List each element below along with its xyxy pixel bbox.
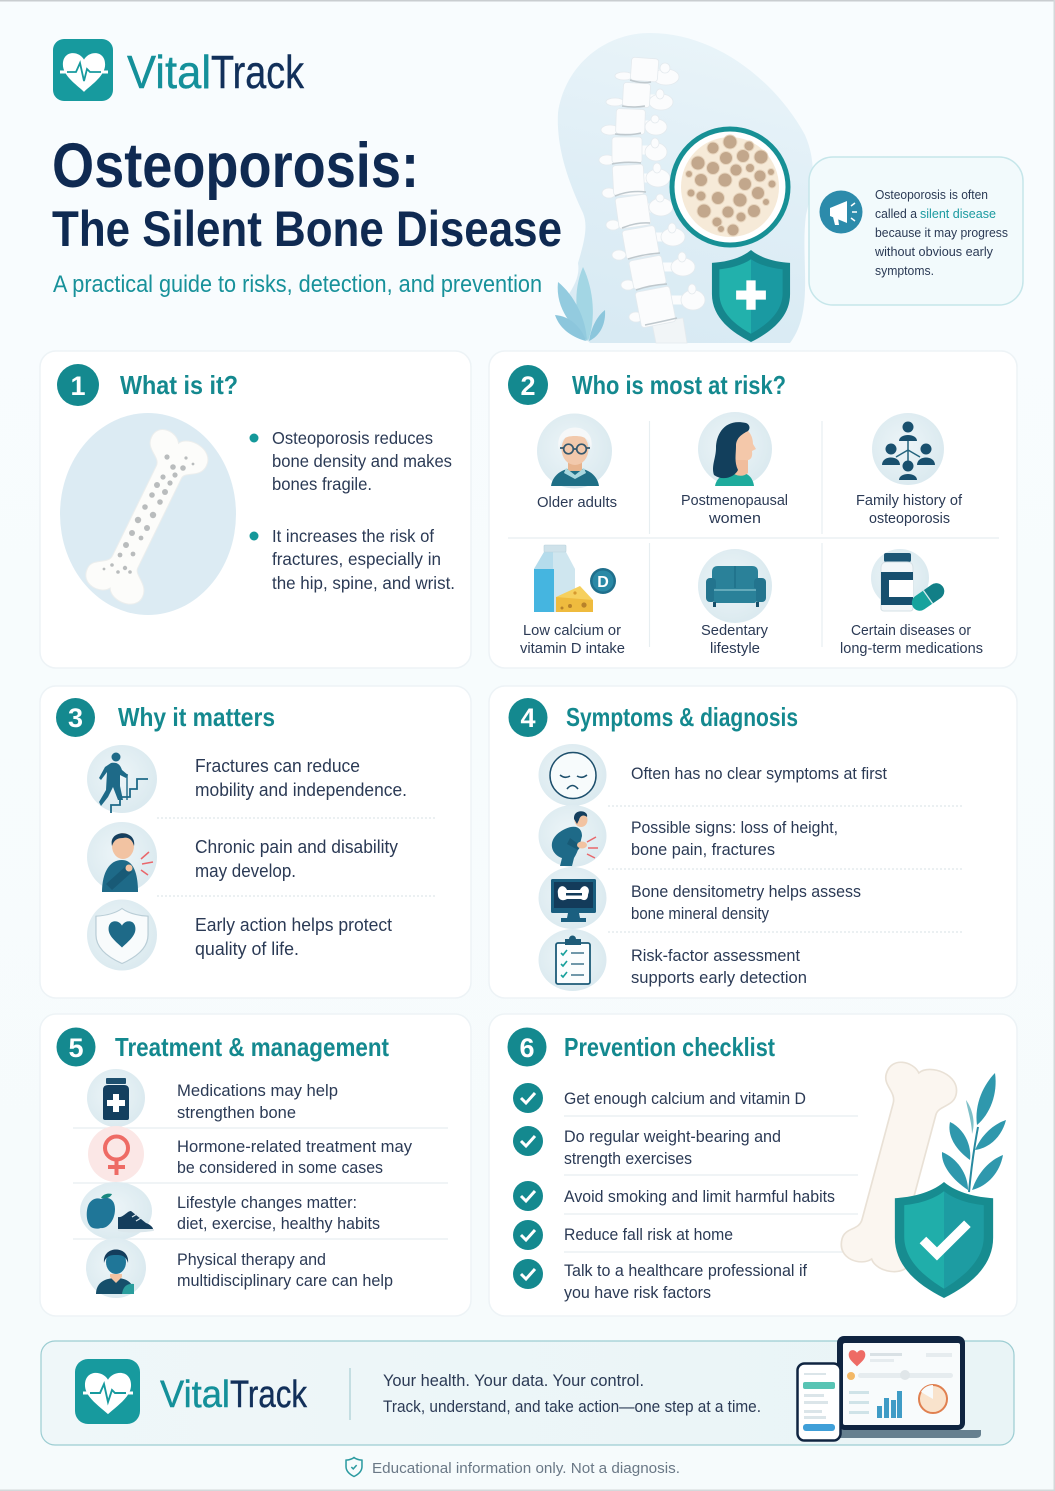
footer band <box>41 1336 1014 1445</box>
panel 2: Who is most at risk? <box>489 351 1017 668</box>
illustration: spine with bone cross-section and shield <box>555 33 813 343</box>
icon: porous bone <box>60 413 236 615</box>
footer tagline: Your health. Your data. Your control. <box>383 1372 644 1390</box>
text: Lifestyle changes matter: <box>177 1194 357 1212</box>
badge 3: 3 <box>68 703 83 733</box>
panel 6: Prevention checklist <box>489 1014 1017 1316</box>
illustration: laptop and phone dashboard <box>798 1336 981 1440</box>
text block: bullets: fractures, especially in <box>272 549 441 569</box>
text: postmenopausal women: Postmenopausal <box>681 493 788 509</box>
text: Often has no clear symptoms at first <box>631 765 887 783</box>
icon: shield with heart <box>87 900 157 970</box>
text: checklist: Do regular weight-bearing and <box>564 1128 781 1146</box>
icon: family history <box>872 413 944 485</box>
logo: VitalTrack header: Track <box>211 46 305 98</box>
text block: bullets <box>250 428 455 593</box>
text <box>195 756 407 800</box>
icon: megaphone <box>820 190 862 234</box>
icon: leaves <box>555 267 605 341</box>
footer wordmark: Vital <box>160 1374 230 1416</box>
text: family history <box>856 493 963 527</box>
icon: pill bottle and capsule <box>871 549 947 614</box>
panel 5: Treatment & management <box>40 1014 471 1316</box>
title: The Silent Bone Disease <box>52 201 562 257</box>
text: Bone densitometry helps assess <box>631 883 861 901</box>
icon: older adult <box>537 414 612 488</box>
text <box>631 883 861 923</box>
icon: care professional <box>86 1238 146 1298</box>
heading: Treatment & management <box>115 1032 389 1062</box>
text: Medications may help <box>177 1082 338 1100</box>
text: checklist: Avoid smoking and limit harmful habits <box>564 1188 835 1206</box>
callout: silent disease: without obvious early <box>874 245 994 259</box>
footer tagline: Track, understand, and take action—one step at a time. <box>383 1398 761 1416</box>
footer tagline <box>383 1372 761 1416</box>
text: Possible signs: loss of height, <box>631 819 838 837</box>
text: quality of life. <box>195 939 299 959</box>
badge 2 <box>508 365 548 405</box>
text block: bullets: bones fragile. <box>272 474 372 494</box>
icon: bone densitometry monitor <box>538 867 606 929</box>
text block: bullets: the hip, spine, and wrist. <box>272 573 455 593</box>
callout: silent disease: because it may progress <box>875 226 1008 240</box>
icon: milk, cheese and vitamin D <box>534 545 616 612</box>
text: sedentary lifestyle: lifestyle <box>710 641 760 657</box>
heading: Prevention checklist <box>564 1032 775 1062</box>
badge 2: 2 <box>520 371 536 401</box>
text: older adults: Older adults <box>537 495 617 511</box>
text: checklist: you have risk factors <box>564 1284 711 1302</box>
icon: shield with check <box>895 1182 993 1298</box>
badge 3 <box>56 698 95 737</box>
badge 5 <box>56 1028 96 1066</box>
icon: leaves <box>942 1073 1006 1192</box>
footer wordmark: Track <box>230 1374 308 1416</box>
text: postmenopausal women <box>681 493 788 527</box>
text: be considered in some cases <box>177 1159 383 1177</box>
text: diet, exercise, healthy habits <box>177 1215 380 1233</box>
text <box>177 1194 380 1233</box>
callout: silent disease: symptoms. <box>875 264 934 278</box>
icon: small shield <box>346 1458 362 1476</box>
badge 5: 5 <box>68 1033 84 1063</box>
text: strengthen bone <box>177 1104 296 1122</box>
text: mobility and independence. <box>195 780 407 800</box>
text: sedentary lifestyle: Sedentary <box>701 623 769 639</box>
text: family history: osteoporosis <box>869 511 950 527</box>
text: postmenopausal women: women <box>708 511 761 527</box>
icon: clipboard checklist <box>538 929 606 991</box>
heading: Symptoms & diagnosis <box>566 702 798 732</box>
text: Risk-factor assessment <box>631 947 800 965</box>
icon: walking up stairs <box>87 745 157 813</box>
heading: Why it matters <box>118 702 275 732</box>
badge 4: 4 <box>520 703 536 733</box>
badge 4 <box>508 698 548 737</box>
text: sedentary lifestyle <box>701 623 769 657</box>
badge 1 <box>57 364 99 406</box>
text: bone pain, fractures <box>631 841 775 859</box>
panel 3: Why it matters <box>40 686 471 998</box>
text <box>631 819 838 859</box>
text: Physical therapy and <box>177 1251 326 1269</box>
text: checklist <box>564 1090 835 1302</box>
icon: shield with plus <box>712 250 790 342</box>
text: Early action helps protect <box>195 915 392 935</box>
icon: sofa <box>698 549 772 623</box>
text block: bullets: It increases the risk of <box>272 526 434 546</box>
logo: VitalTrack header: Vital <box>127 46 211 98</box>
icon: apple and shoe <box>80 1182 153 1240</box>
panel 4: Symptoms & diagnosis <box>489 686 1017 998</box>
text: checklist: Reduce fall risk at home <box>564 1226 733 1244</box>
text block: bullets: bone density and makes <box>272 451 452 471</box>
text: checklist: Get enough calcium and vitamin D <box>564 1090 806 1108</box>
text: Hormone-related treatment may <box>177 1138 413 1156</box>
illustration: bone, leaves and shield <box>837 1058 1006 1298</box>
icon: bone cross-section <box>672 129 788 245</box>
text: checklist: Talk to a healthcare professional if <box>564 1262 807 1280</box>
text: low calcium <box>520 623 625 657</box>
subtitle: A practical guide to risks, detection, and prevention <box>53 271 542 298</box>
text: Fractures can reduce <box>195 756 360 776</box>
text <box>195 837 398 881</box>
text <box>177 1251 393 1290</box>
callout: silent disease <box>809 157 1023 305</box>
title <box>52 131 562 257</box>
icon: heart app logo <box>53 39 113 101</box>
text: supports early detection <box>631 969 807 987</box>
title: Osteoporosis: <box>52 131 419 201</box>
text: bone mineral density <box>631 905 770 923</box>
icon: postmenopausal woman <box>698 412 772 486</box>
icon: bent person with back pain <box>538 805 606 867</box>
panel 1: What is it? <box>40 351 471 668</box>
badge 1: 1 <box>70 371 86 401</box>
text: multidisciplinary care can help <box>177 1272 393 1290</box>
text: diseases and medications: long-term medications <box>840 641 983 657</box>
text: diseases and medications: Certain diseases or <box>851 623 971 639</box>
text <box>631 947 807 987</box>
callout: silent disease: silent disease <box>920 207 996 221</box>
icon: neutral face <box>538 744 606 806</box>
logo: VitalTrack header <box>53 39 305 101</box>
icon: milk, cheese and vitamin D: D <box>597 574 609 591</box>
heading: What is it? <box>120 370 238 400</box>
text: low calcium: vitamin D intake <box>520 641 625 657</box>
icon: footer logo <box>75 1359 140 1424</box>
text: diseases and medications <box>840 623 983 657</box>
icon: medication bottle <box>87 1069 145 1127</box>
icon: check marks <box>513 1083 543 1289</box>
footer wordmark <box>160 1374 308 1416</box>
badge 6: 6 <box>519 1033 535 1063</box>
icon: spine <box>599 57 705 343</box>
text <box>177 1082 338 1122</box>
disclaimer: Educational information only. Not a diagnosis. <box>372 1460 680 1477</box>
badge 6 <box>508 1028 546 1066</box>
callout: silent disease: Osteoporosis is often <box>875 188 988 202</box>
text: checklist: strength exercises <box>564 1150 692 1168</box>
text <box>177 1138 413 1177</box>
text: may develop. <box>195 861 296 881</box>
text: Chronic pain and disability <box>195 837 398 857</box>
icon: female symbol <box>88 1126 144 1182</box>
heading: Who is most at risk? <box>572 370 786 400</box>
text: low calcium: Low calcium or <box>523 623 621 639</box>
text <box>195 915 392 959</box>
text: family history: Family history of <box>856 493 963 509</box>
callout: silent disease: called a <box>875 207 917 221</box>
text block: bullets: Osteoporosis reduces <box>272 428 433 448</box>
icon: chronic pain person <box>87 822 157 892</box>
